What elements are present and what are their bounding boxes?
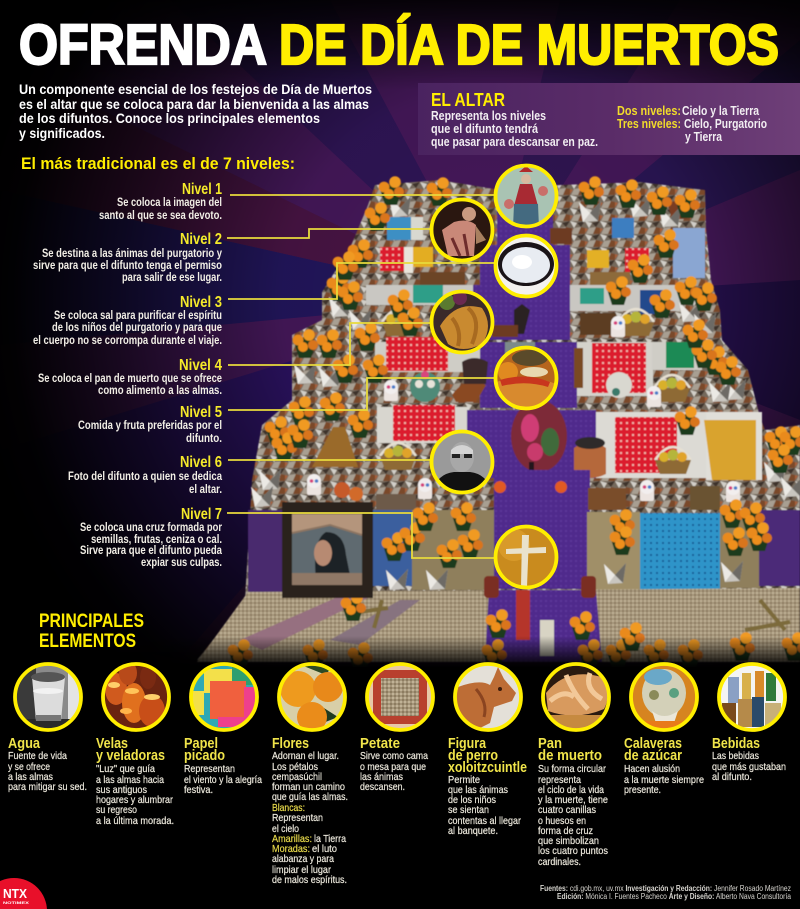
element: flores: cempasúchil bbox=[272, 771, 322, 783]
element: calaveras de azucar: presente. bbox=[624, 784, 661, 796]
nivel 4 text bbox=[38, 357, 222, 397]
nivel 7 text: Nivel 7 bbox=[181, 506, 222, 523]
framed portrait bbox=[282, 502, 373, 598]
nivel 2 text: sirve para que el difunto tenga el permiso bbox=[33, 260, 222, 272]
element: flores bbox=[272, 735, 348, 886]
icon: nivel 3 salt bowl bbox=[494, 234, 558, 298]
icon: bebidas bottles bbox=[718, 663, 786, 731]
bottom fade to black bbox=[0, 636, 800, 909]
panel: el altar bbox=[418, 83, 800, 155]
element: agua: y se ofrece bbox=[8, 761, 50, 773]
element: calaveras de azucar bbox=[624, 735, 704, 796]
element: velas y veladoras: Velas bbox=[96, 735, 128, 752]
element: velas y veladoras: a las almas hacia bbox=[96, 774, 164, 786]
element: figura de perro xoloitzcuintle: contentas al llegar bbox=[448, 815, 521, 827]
altar levels note: Tres niveles: bbox=[617, 117, 681, 131]
element: flores: Flores bbox=[272, 735, 309, 752]
altar levels note: Cielo, Purgatorio bbox=[684, 117, 767, 131]
intro paragraph: es el altar que se coloca para dar la bienvenida a las almas bbox=[19, 96, 369, 112]
altar description bbox=[431, 109, 598, 149]
nivel 5 text: Comida y fruta preferidas por el bbox=[78, 420, 222, 432]
nivel 4 text: Se coloca el pan de muerto que se ofrece bbox=[38, 373, 222, 385]
icon: velas candles bbox=[102, 661, 170, 731]
nivel 2 text bbox=[33, 231, 222, 284]
element: calaveras de azucar: Calaveras bbox=[624, 735, 682, 752]
element: figura de perro xoloitzcuintle: se sientan bbox=[448, 804, 489, 816]
marigolds bbox=[228, 176, 800, 671]
element: figura de perro xoloitzcuintle: Permite bbox=[448, 774, 480, 786]
heading: principales elementos bbox=[39, 611, 144, 652]
icon: nivel 5 food bbox=[494, 346, 558, 410]
nivel 1 text: santo al que se sea devoto. bbox=[99, 210, 222, 222]
icon: papel picado bbox=[190, 663, 258, 731]
element: bebidas bbox=[712, 735, 786, 783]
nivel 3 text bbox=[33, 294, 222, 347]
element: papel picado: Papel bbox=[184, 735, 218, 752]
nivel 3 text: Se coloca sal para purificar el espíritu bbox=[54, 310, 222, 322]
element: petate bbox=[360, 735, 428, 793]
element: agua: Agua bbox=[8, 735, 41, 752]
element: flores: Blancas: bbox=[272, 802, 305, 814]
element: pan de muerto: cardinales. bbox=[538, 856, 581, 868]
nivel 1 text bbox=[99, 181, 222, 222]
altar silhouette bbox=[197, 180, 800, 660]
element: pan de muerto: los cuatro puntos bbox=[538, 845, 608, 857]
intro paragraph: y significados. bbox=[19, 125, 105, 141]
nivel 1 text: Nivel 1 bbox=[182, 181, 222, 198]
element: flores: Representan bbox=[272, 812, 323, 824]
altar levels note bbox=[617, 104, 767, 144]
nivel 7 text: Se coloca una cruz formada por bbox=[80, 522, 222, 534]
element: agua: para mitigar su sed. bbox=[8, 781, 87, 793]
element: figura de perro xoloitzcuintle: que las ánimas bbox=[448, 784, 508, 796]
nivel 3 text: el cuerpo no se corrompa durante el viaje. bbox=[33, 335, 222, 347]
nivel 7 text: expiar sus culpas. bbox=[141, 557, 222, 569]
element: figura de perro xoloitzcuintle: Figura bbox=[448, 735, 487, 752]
element: agua bbox=[8, 735, 87, 793]
element: flores: Adornan el lugar. bbox=[272, 750, 339, 762]
element: pan de muerto: cuatro canillas bbox=[538, 804, 596, 816]
element: flores: Amarillas: bbox=[272, 833, 312, 845]
woven floor mat and purple runner bbox=[197, 576, 800, 662]
title: OFRENDA bbox=[19, 13, 267, 77]
flower wreath bbox=[511, 400, 567, 472]
altar description: que el difunto tendrá bbox=[431, 122, 538, 136]
element: petate: o mesa para que bbox=[360, 761, 426, 773]
element: petate: descansen. bbox=[360, 781, 405, 793]
altar photo bbox=[197, 176, 800, 671]
icon: agua glass bbox=[14, 663, 82, 731]
element: bebidas: al difunto. bbox=[712, 771, 752, 783]
title bbox=[19, 13, 779, 77]
element: papel picado: el viento y la alegría bbox=[184, 774, 262, 786]
element: agua: a las almas bbox=[8, 771, 53, 783]
element: pan de muerto: y la muerte, tiene bbox=[538, 794, 608, 806]
altar tier 7 cloths bbox=[248, 510, 800, 592]
icon: flores marigolds bbox=[278, 663, 346, 732]
nivel 4 text: Nivel 4 bbox=[179, 357, 222, 374]
element: figura de perro xoloitzcuintle: de los niños bbox=[448, 794, 496, 806]
element: velas y veladoras bbox=[96, 735, 174, 827]
nivel 2 text: Nivel 2 bbox=[180, 231, 222, 248]
element: pan de muerto: Su forma circular bbox=[538, 763, 606, 775]
element: flores: limpiar el lugar bbox=[272, 864, 331, 876]
intro paragraph: Un componente esencial de los festejos de Día de Muertos bbox=[19, 81, 372, 97]
element: velas y veladoras: a la última morada. bbox=[96, 815, 174, 827]
element: velas y veladoras: y veladoras bbox=[96, 747, 165, 764]
intro paragraph: de los difuntos. Conoce los principales elementos bbox=[19, 110, 320, 126]
nivel 4 text: como alimento a las almas. bbox=[98, 385, 222, 397]
nivel 5 text: Nivel 5 bbox=[180, 404, 222, 421]
nivel 2 text: para salir de ese lugar. bbox=[122, 272, 222, 284]
credits: Edición: Mónica I. Fuentes Pacheco Arte y Diseño: Alberto Nava Consultoría bbox=[557, 892, 791, 901]
element: petate: Petate bbox=[360, 735, 400, 752]
element: papel picado: picado bbox=[184, 747, 225, 764]
nivel 3 text: de los niños del purgatorio y para que bbox=[52, 322, 222, 334]
element: flores: de malos espíritus. bbox=[272, 874, 347, 886]
altar tier 5 bbox=[312, 400, 762, 492]
credits bbox=[540, 884, 791, 901]
icon: calaveras de azucar bbox=[630, 663, 698, 731]
element: flores: el cielo bbox=[272, 823, 299, 835]
altar description: Representa los niveles bbox=[431, 109, 546, 123]
element: flores: que guía las almas. bbox=[272, 791, 348, 803]
element: pan de muerto: forma de cruz bbox=[538, 825, 593, 837]
element: flores: Los pétalos bbox=[272, 761, 318, 773]
element: figura de perro xoloitzcuintle: al banquete. bbox=[448, 825, 498, 837]
element: velas y veladoras: hogares y alumbrar bbox=[96, 794, 173, 806]
element: papel picado: festiva. bbox=[184, 784, 213, 796]
element: pan de muerto: Pan bbox=[538, 735, 562, 752]
nivel 7 text bbox=[80, 506, 222, 569]
logo: NTX: NTX bbox=[3, 886, 27, 901]
element: calaveras de azucar: a la muerte siempre bbox=[624, 774, 704, 786]
nivel 7 text: Sirve para que el difunto pueda bbox=[80, 545, 222, 557]
element: figura de perro xoloitzcuintle: xoloitzcuintle bbox=[448, 759, 527, 776]
nivel 5 text: difunto. bbox=[186, 433, 222, 445]
element: flores: forman un camino bbox=[272, 781, 345, 793]
icon: nivel 4 bread bbox=[430, 290, 494, 354]
altar levels note: Dos niveles: bbox=[617, 104, 681, 118]
altar description: que pasar para descansar en paz. bbox=[431, 135, 598, 149]
heading: siete niveles: El más tradicional es el de 7 niveles: bbox=[21, 154, 295, 173]
altar tier 3 bbox=[366, 285, 680, 340]
altar tier 1 bbox=[387, 183, 705, 278]
nivel 7 text: semillas, frutas, ceniza o cal. bbox=[91, 534, 222, 546]
nivel 6 text: Nivel 6 bbox=[180, 454, 222, 471]
icon: petate mat bbox=[366, 663, 434, 731]
nivel 2 text: Se destina a las ánimas del purgatorio y bbox=[42, 248, 222, 260]
element: velas y veladoras: "Luz" que guía bbox=[96, 763, 155, 775]
heading: principales elementos: ELEMENTOS bbox=[39, 631, 136, 652]
element: bebidas: Bebidas bbox=[712, 735, 760, 752]
altar levels note: y Tierra bbox=[685, 130, 723, 144]
element: papel picado: Representan bbox=[184, 763, 235, 775]
element: calaveras de azucar: de azúcar bbox=[624, 747, 682, 764]
nivel 5 text bbox=[78, 404, 222, 445]
element: pan de muerto: de muerto bbox=[538, 747, 602, 764]
element: calaveras de azucar: Hacen alusión bbox=[624, 763, 680, 775]
altar tier 4 bbox=[375, 337, 746, 408]
intro paragraph bbox=[19, 81, 372, 141]
logo: NTX: NOTIMEX bbox=[3, 901, 30, 905]
element: flores: Moradas: bbox=[272, 843, 310, 855]
icon: nivel 2 painting bbox=[430, 198, 494, 262]
element: bebidas: que más gustaban bbox=[712, 761, 786, 773]
element: agua: Fuente de vida bbox=[8, 750, 67, 762]
element: petate: Sirve como cama bbox=[360, 750, 428, 762]
nivel 1 text: Se coloca la imagen del bbox=[117, 197, 222, 209]
heading: principales elementos: PRINCIPALES bbox=[39, 611, 144, 632]
element: pan de muerto: que simbolizan bbox=[538, 835, 599, 847]
connector lines bbox=[227, 195, 495, 558]
element: papel picado bbox=[184, 735, 262, 796]
element: pan de muerto bbox=[538, 735, 608, 868]
element: figura de perro xoloitzcuintle: de perro bbox=[448, 747, 498, 764]
element: bebidas: Las bebidas bbox=[712, 750, 759, 762]
nivel 6 text bbox=[68, 454, 222, 496]
silver wrappers bbox=[294, 196, 800, 590]
altar levels note: Cielo y la Tierra bbox=[682, 104, 760, 118]
element: pan de muerto: o huesos en bbox=[538, 815, 586, 827]
altar tier 2 bbox=[380, 245, 649, 286]
element: flores: alabanza y para bbox=[272, 853, 334, 865]
element: flores: el luto bbox=[312, 843, 337, 855]
element: figura de perro xoloitzcuintle bbox=[448, 735, 527, 837]
element: velas y veladoras: su regreso bbox=[96, 804, 137, 816]
element: velas y veladoras: sus antiguos bbox=[96, 784, 147, 796]
element: pan de muerto: el ciclo de la vida bbox=[538, 784, 604, 796]
heading: el altar: EL ALTAR bbox=[431, 90, 505, 110]
element: flores: la Tierra bbox=[314, 833, 346, 845]
credits: Fuentes: cdi.gob.mx, uv.mx Investigación y Redacción: Jennifer Rosado Martínez bbox=[540, 884, 791, 893]
element: pan de muerto: representa bbox=[538, 774, 581, 786]
logo: NTX bbox=[0, 878, 47, 909]
element: petate: las ánimas bbox=[360, 771, 403, 783]
icon: nivel 6 deceased photo bbox=[430, 430, 494, 494]
icon: pan de muerto bbox=[542, 663, 610, 731]
nivel 3 text: Nivel 3 bbox=[180, 294, 222, 311]
nivel 6 text: Foto del difunto a quien se dedica bbox=[68, 471, 222, 483]
icon: nivel 7 cross bbox=[494, 525, 558, 589]
nivel 6 text: el altar. bbox=[189, 484, 222, 496]
icon: nivel 1 saint bbox=[494, 164, 558, 228]
icon: xoloitzcuintle figure bbox=[454, 663, 522, 731]
altar tier 6 offerings bbox=[251, 469, 740, 513]
